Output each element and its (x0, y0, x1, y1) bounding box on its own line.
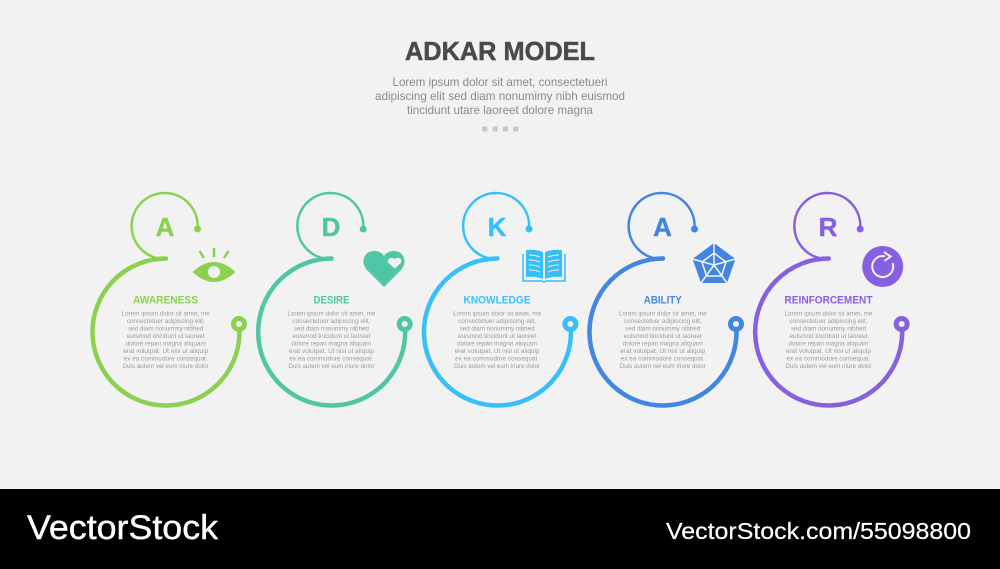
body text: consectetuer adipiscing elit, (292, 318, 371, 325)
body text: erat volutpat. Ut nisl ut aliquip (123, 348, 209, 355)
body text: erat volutpat. Ut nisl ut aliquip (455, 348, 540, 355)
body text (287, 310, 376, 370)
body text: sed diam nonummy nibhed (791, 326, 866, 332)
body text (453, 310, 541, 370)
icon: eye (192, 248, 236, 282)
heading: DESIRE (314, 294, 350, 306)
title: ADKAR MODEL (405, 36, 595, 66)
body text: sed diam nonummy nibhed (294, 326, 369, 332)
body text: sed diam nonummy nibhed (128, 326, 204, 332)
letter: D (322, 212, 340, 242)
footer band (0, 489, 1000, 569)
body text: Lorem ipsum dolor sit amet, me (784, 310, 873, 318)
body text (784, 310, 873, 370)
body text: ex ea commodore consequat. (621, 356, 705, 362)
body text: Duis autem vel eum iriure dolor (786, 363, 872, 370)
panel: awareness (92, 193, 244, 405)
letter: K (488, 212, 507, 242)
body text: Duis autem vel eum iriure dolor (288, 363, 375, 370)
body text: Lorem ipsum dolor sit amet, me (122, 310, 210, 318)
icon: open book (523, 250, 565, 282)
icon: heart (363, 251, 405, 287)
body text: consectetuer adipiscing elit, (458, 318, 536, 325)
heading: REINFORCEMENT (784, 294, 873, 306)
body text: Lorem ipsum dolor sit amet, me (453, 310, 541, 318)
body text: euismod tincidunt ut laoreet (624, 333, 702, 340)
body text: Duis autem vel eum iriure dolor (123, 363, 209, 370)
panel: knowledge (424, 193, 576, 406)
body text: dolore repari magna aliquam (126, 340, 206, 348)
intro text: Lorem ipsum dolor sit amet, consectetueri (392, 75, 608, 89)
body text (122, 310, 210, 370)
intro text: adipiscing elit sed diam nonumimy nibh euismod (375, 89, 625, 103)
body text: euismod tincidunt ut laoreet (127, 333, 205, 340)
body text: euismod tincidunt ut laoreet (292, 333, 371, 340)
intro text (375, 75, 625, 117)
body text: euismod tincidunt ut laoreet (458, 333, 536, 340)
body text (619, 310, 707, 370)
body text: consectetuer adipiscing elit, (127, 318, 205, 325)
footer logo text: VectorStock (27, 509, 219, 547)
body text: ex ea commodore consequat. (124, 356, 208, 362)
outline: reinforcement (755, 193, 907, 406)
intro text: tincidunt utare laoreet dolore magna (407, 103, 593, 117)
title dots (482, 126, 518, 132)
body text: Lorem ipsum dolor sit amet, me (619, 310, 707, 318)
panel: ability (589, 193, 742, 405)
body text: ex ea commodore consequat. (786, 356, 871, 362)
body text: Duis autem vel eum iriure dolor (454, 363, 541, 370)
body text: ex ea commodore consequat. (455, 356, 539, 362)
body text: dolore repari magna aliquam (291, 340, 371, 348)
outline: awareness (92, 193, 244, 405)
panel: reinforcement (755, 193, 907, 406)
outline: knowledge (424, 193, 576, 406)
body text: consectetuer adipiscing elit, (790, 318, 868, 325)
body text: ex ea commodore consequat. (289, 356, 374, 362)
outline: desire (258, 193, 410, 406)
body text: Duis autem vel eum iriure dolor (620, 363, 707, 370)
letter: A (156, 212, 175, 242)
body text: dolore repari magna aliquam (457, 340, 537, 348)
letter: A (653, 212, 672, 242)
panel: desire (258, 193, 410, 406)
body text: consectetuer adipiscing elit, (624, 318, 702, 325)
heading: AWARENESS (133, 294, 198, 306)
body text: dolore repari magna aliquam (788, 340, 868, 348)
body text: sed diam nonummy nibhed (625, 326, 701, 332)
body text: Lorem ipsum dolor sit amet, me (287, 310, 376, 318)
footer url: VectorStock.com/55098800 (666, 518, 971, 544)
heading: KNOWLEDGE (464, 294, 530, 306)
body text: erat volutpat. Ut nisl ut aliquip (289, 348, 374, 355)
outline: ability (589, 193, 742, 405)
icon: refresh (862, 246, 903, 287)
body text: sed diam nonummy nibhed (460, 326, 535, 332)
letter: R (819, 212, 838, 242)
body text: dolore repari magna aliquam (623, 340, 703, 348)
body text: erat volutpat. Ut nisl ut aliquip (786, 348, 871, 355)
body text: erat volutpat. Ut nisl ut aliquip (620, 348, 706, 355)
heading: ABILITY (644, 294, 682, 306)
body text: euismod tincidunt ut laoreet (790, 333, 868, 340)
icon: pentagon radar (692, 243, 736, 283)
